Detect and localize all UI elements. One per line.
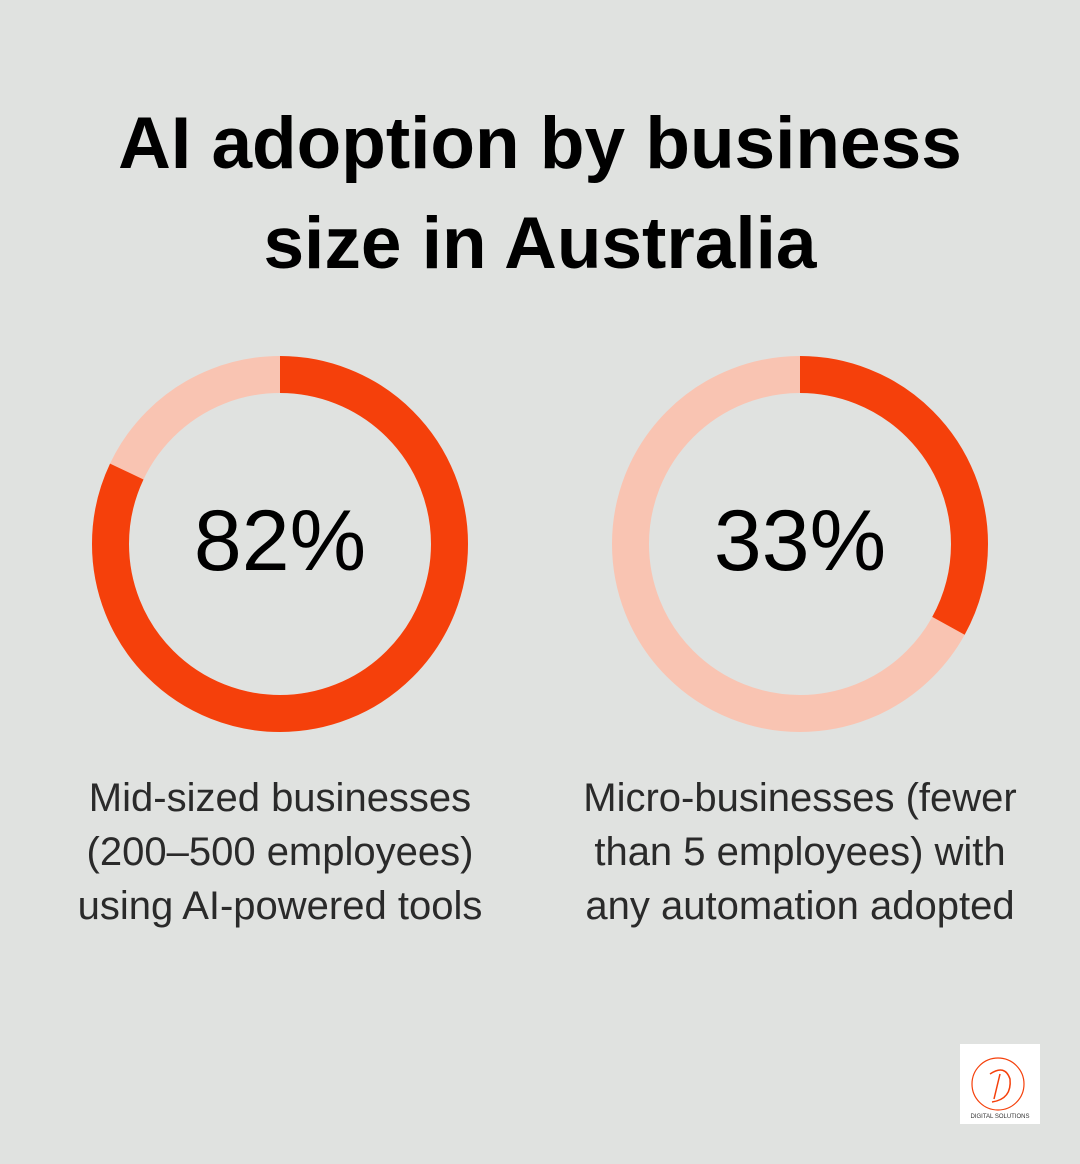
donut chart: 82%: 82% — [194, 493, 366, 589]
label: mid-sized: using AI-powered tools — [78, 884, 482, 928]
logo — [960, 1044, 1040, 1124]
logo: DIGITAL SOLUTIONS — [970, 1114, 1030, 1120]
label: mid-sized: Mid-sized businesses — [89, 776, 471, 820]
label: micro — [583, 776, 1017, 928]
title: size in Australia — [263, 203, 817, 284]
label: mid-sized — [78, 776, 482, 928]
donut chart: 33%: 33% — [714, 493, 886, 589]
label: micro: any automation adopted — [585, 884, 1015, 928]
label: micro: Micro-businesses (fewer — [583, 776, 1017, 820]
label: mid-sized: (200–500 employees) — [87, 830, 473, 874]
title: AI adoption by business — [118, 103, 962, 184]
label: micro: than 5 employees) with — [594, 830, 1006, 874]
title — [118, 103, 962, 284]
